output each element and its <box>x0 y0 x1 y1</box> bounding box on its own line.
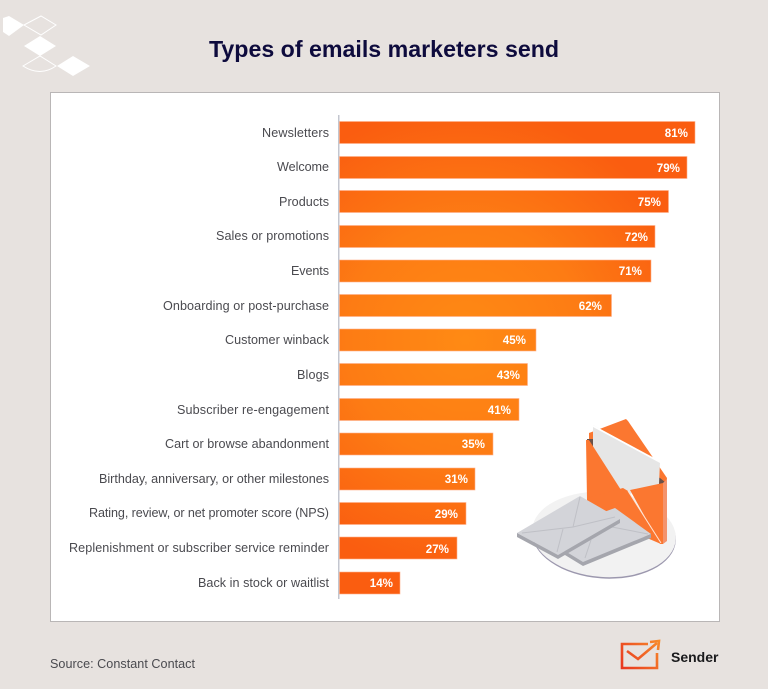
chart axis <box>338 115 340 599</box>
left panel <box>586 440 621 499</box>
value labels: 41% <box>488 404 511 417</box>
logo icon <box>622 641 659 668</box>
back flap <box>589 419 667 500</box>
letter paper <box>593 425 660 494</box>
dark interior <box>587 439 665 490</box>
category labels: Blogs <box>297 368 329 382</box>
value labels: 79% <box>657 162 680 175</box>
source note: Source: Constant Contact <box>50 657 196 671</box>
plate <box>529 487 679 583</box>
envelope side edge <box>663 479 667 544</box>
value labels: 72% <box>625 231 648 244</box>
title: Types of emails marketers send <box>209 36 559 62</box>
open orange envelope <box>586 419 667 544</box>
value labels: 75% <box>638 196 661 209</box>
category labels: Birthday, anniversary, or other milestones <box>99 472 329 486</box>
value labels: 29% <box>435 508 458 521</box>
category labels: Products <box>279 195 329 209</box>
value labels: 14% <box>370 577 393 590</box>
value labels: 35% <box>462 438 485 451</box>
logo wordmark: Sender <box>671 649 719 665</box>
grey envelope back <box>540 508 651 566</box>
category labels: Sales or promotions <box>216 229 329 243</box>
bars <box>340 122 695 594</box>
category labels: Customer winback <box>225 333 330 347</box>
front flap <box>587 488 661 544</box>
grey envelope front <box>517 496 620 559</box>
category labels: Cart or browse abandonment <box>165 437 330 451</box>
category labels: Newsletters <box>262 126 329 140</box>
panel: chart <box>50 92 720 671</box>
value labels: 45% <box>503 334 526 347</box>
value labels: 62% <box>579 300 602 313</box>
category labels: Back in stock or waitlist <box>198 576 330 590</box>
category labels <box>69 126 330 590</box>
category labels: Subscriber re-engagement <box>177 403 330 417</box>
value labels: 43% <box>497 369 520 382</box>
illustration: envelopes on a plate <box>517 419 679 583</box>
category labels: Events <box>291 264 329 278</box>
value labels: 81% <box>665 127 688 140</box>
category labels: Welcome <box>277 160 329 174</box>
bar chart <box>69 115 695 599</box>
value labels <box>370 127 688 590</box>
category labels: Onboarding or post-purchase <box>163 299 329 313</box>
value labels: 27% <box>426 543 449 556</box>
right panel <box>630 483 663 544</box>
value labels: 71% <box>619 265 642 278</box>
category labels: Replenishment or subscriber service reminder <box>69 541 329 555</box>
logo: Sender <box>622 641 719 668</box>
value labels: 31% <box>445 473 468 486</box>
decorative diamonds <box>3 16 90 76</box>
category labels: Rating, review, or net promoter score (NPS) <box>89 506 329 520</box>
